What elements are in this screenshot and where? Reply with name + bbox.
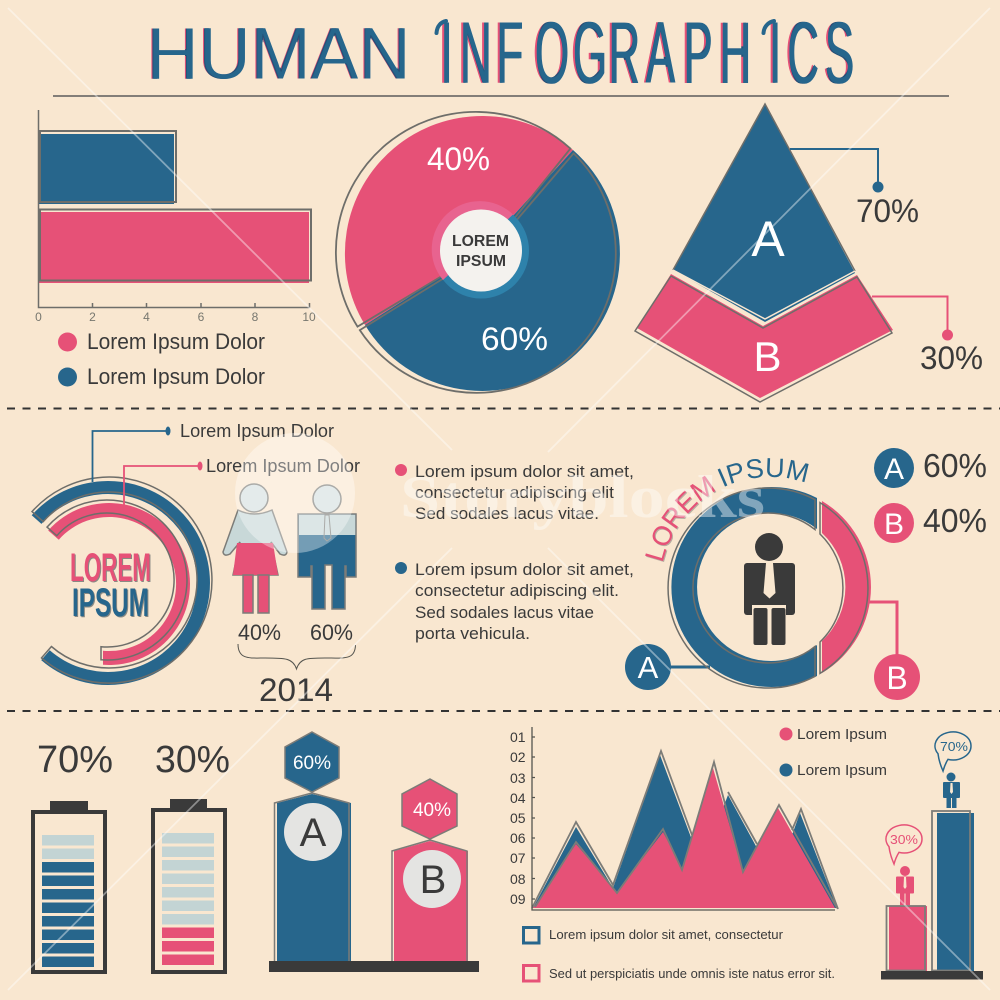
connector: blue — [92, 431, 167, 482]
y axis labels: 04 — [510, 790, 526, 806]
pyramid labels: 30% — [920, 340, 983, 376]
legend — [58, 329, 265, 389]
battery cells — [42, 835, 94, 967]
centre label: LOREM — [452, 233, 509, 250]
panel: area chart — [510, 726, 887, 981]
text block: description: consectetur adipiscing elit. — [415, 581, 619, 600]
legend: dots — [780, 726, 887, 779]
column A: A — [300, 811, 327, 855]
panel: battery 30% — [153, 739, 230, 972]
curved label — [645, 458, 809, 562]
legend: dots: Lorem Ipsum — [797, 762, 887, 779]
panel: pie chart — [336, 112, 620, 393]
y axis labels: 07 — [510, 850, 526, 866]
panel: horizontal bar chart — [35, 110, 316, 389]
legend: Lorem Ipsum Dolor — [87, 329, 265, 354]
slice: blue 60% — [365, 150, 620, 391]
speech bubble: 70%: 70% — [940, 739, 968, 754]
legend: squares: Lorem ipsum dolor sit amet, consectetur — [549, 927, 784, 942]
panel: pyramid chart: B — [753, 333, 782, 380]
panel: person donut chart — [625, 447, 987, 700]
ring: pink — [48, 503, 190, 665]
battery cells — [162, 833, 214, 965]
curved label: LOREM — [645, 476, 716, 561]
hexagon B — [402, 779, 457, 839]
donut: blue arc — [671, 487, 817, 687]
segment A — [673, 104, 855, 322]
column B: B — [420, 858, 446, 902]
axis labels: 10 — [302, 310, 316, 324]
legend: squares — [524, 927, 835, 981]
ring centre title: LOREM — [71, 547, 152, 591]
text block: description: Sed sodales lacus vitae — [415, 603, 594, 622]
bar: pink — [886, 906, 927, 971]
pyramid labels: 70% — [856, 193, 919, 229]
y axis labels: 08 — [510, 871, 526, 887]
segment B — [637, 274, 893, 398]
axis labels: 4 — [143, 310, 150, 324]
column B — [392, 840, 468, 962]
pyramid labels — [856, 193, 983, 376]
ring: blue — [32, 481, 210, 685]
bar: blue — [39, 134, 174, 204]
legend: A 60% — [874, 447, 987, 488]
text block: description: Lorem ipsum dolor sit amet, — [415, 560, 634, 579]
panel: battery 70% — [33, 739, 113, 972]
connector: A — [671, 666, 710, 668]
centre ring — [433, 202, 529, 298]
hexagon B: 40% — [413, 800, 451, 821]
y axis labels: 05 — [510, 810, 526, 826]
area: blue — [533, 755, 837, 908]
hexagon A: 60% — [293, 753, 331, 774]
y axis labels: 01 — [510, 729, 526, 745]
badge: B bottom: B — [886, 660, 908, 696]
legend: A 60%: A — [884, 453, 904, 486]
title: INFOGRAPHICS — [440, 3, 854, 102]
legend: A 60%: 60% — [923, 447, 987, 484]
title: HUMAN — [145, 12, 409, 95]
icon: pink person — [896, 866, 914, 905]
pie values: 60% — [481, 321, 548, 357]
panel: hexagon columns — [269, 732, 479, 972]
bar: pink — [39, 212, 309, 283]
curved label: IPSUM — [718, 458, 809, 486]
panel: concentric ring chart — [32, 421, 360, 685]
axis labels: 6 — [198, 310, 205, 324]
panel: pyramid chart: A — [751, 211, 785, 267]
panel: people bar chart — [881, 732, 983, 980]
text block: description: consectetur adipiscing elit — [415, 483, 614, 502]
badge: B bottom — [874, 654, 920, 700]
panel: gender icons — [223, 484, 356, 708]
slice: pink 40% — [345, 116, 573, 325]
icon: woman — [223, 484, 287, 613]
y axis labels — [510, 729, 526, 907]
donut: pink arc — [822, 501, 871, 673]
legend: B 40% — [874, 502, 987, 543]
ring centre title: LOREM — [70, 546, 151, 590]
gender values — [238, 620, 353, 645]
pie values — [427, 141, 548, 357]
speech bubble: 30%: 30% — [890, 832, 918, 847]
watermark: Storyblocks — [400, 464, 765, 530]
axis labels: 2 — [89, 310, 96, 324]
ring centre title: IPSUM — [73, 582, 150, 626]
axis labels: 8 — [252, 310, 259, 324]
value: 70% — [37, 739, 113, 781]
base — [269, 961, 479, 972]
year: 2014 — [259, 672, 333, 708]
y axis labels: 03 — [510, 770, 526, 786]
connector: 30% — [872, 296, 948, 335]
icon: businessman — [744, 533, 795, 645]
legend: squares: Sed ut perspiciatis unde omnis iste natus error sit. — [549, 966, 835, 981]
panel: pyramid chart — [635, 104, 983, 402]
axis labels — [35, 310, 316, 324]
title: HUMAN — [147, 12, 411, 95]
axis labels: 0 — [35, 310, 42, 324]
area: pink — [533, 768, 835, 908]
brace — [238, 644, 356, 669]
base — [881, 971, 983, 980]
legend: Lorem Ipsum Dolor — [87, 364, 265, 389]
legend: B 40%: 40% — [923, 502, 987, 539]
icon: battery body — [33, 801, 105, 972]
text block: description: Sed sodales lacus vitae. — [415, 504, 599, 523]
ring labels: Lorem Ipsum Dolor — [206, 456, 360, 476]
ring centre title: IPSUM — [72, 581, 149, 625]
ring labels — [180, 421, 360, 476]
column A — [274, 793, 351, 962]
centre label: IPSUM — [456, 253, 506, 270]
text block: description — [395, 462, 634, 643]
connector: 70% — [790, 149, 878, 187]
legend: dots: Lorem Ipsum — [797, 726, 887, 743]
connector: B — [868, 602, 897, 655]
pie values: 40% — [427, 141, 490, 177]
gender values: 40% — [238, 620, 281, 645]
connector: pink — [124, 466, 200, 505]
curved label: LOREM — [646, 476, 716, 562]
title: INFOGRAPHICS — [439, 3, 852, 102]
y axis labels: 09 — [510, 891, 526, 907]
badge: A bottom — [625, 644, 671, 690]
text block: description: porta vehicula. — [415, 624, 530, 643]
gender values: 60% — [310, 620, 353, 645]
y axis labels: 06 — [510, 830, 526, 846]
value: 30% — [155, 739, 230, 781]
y axis labels: 02 — [510, 749, 526, 765]
hexagon A — [285, 732, 339, 792]
legend: B 40%: B — [884, 508, 904, 541]
bar: blue — [932, 811, 974, 971]
icon: blue person — [943, 772, 960, 808]
axes — [532, 727, 835, 910]
badge: A bottom: A — [638, 650, 659, 685]
text block: description: Lorem ipsum dolor sit amet, — [415, 462, 634, 481]
icon: man — [298, 485, 356, 609]
ring centre title — [70, 546, 152, 626]
centre label — [452, 233, 509, 270]
speech bubble: 30% — [886, 825, 922, 864]
title — [145, 3, 854, 102]
ring labels: Lorem Ipsum Dolor — [180, 421, 334, 441]
icon: battery body — [153, 799, 225, 972]
speech bubble: 70% — [935, 732, 971, 771]
